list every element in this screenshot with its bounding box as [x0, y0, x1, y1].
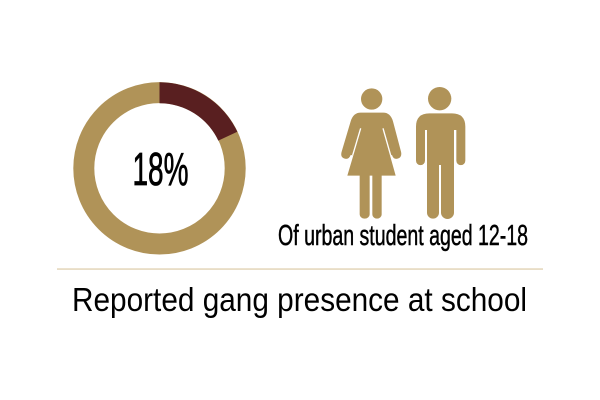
donut segment: 18%	[160, 82, 237, 141]
divider	[57, 268, 543, 270]
donut chart: 18%	[84, 82, 237, 244]
icon: woman and man	[341, 87, 465, 219]
icon: man	[416, 87, 465, 219]
donut value: 18%	[132, 143, 188, 195]
title: Reported gang presence at school	[72, 281, 527, 318]
icon: woman	[341, 88, 401, 219]
donut track	[84, 93, 235, 244]
